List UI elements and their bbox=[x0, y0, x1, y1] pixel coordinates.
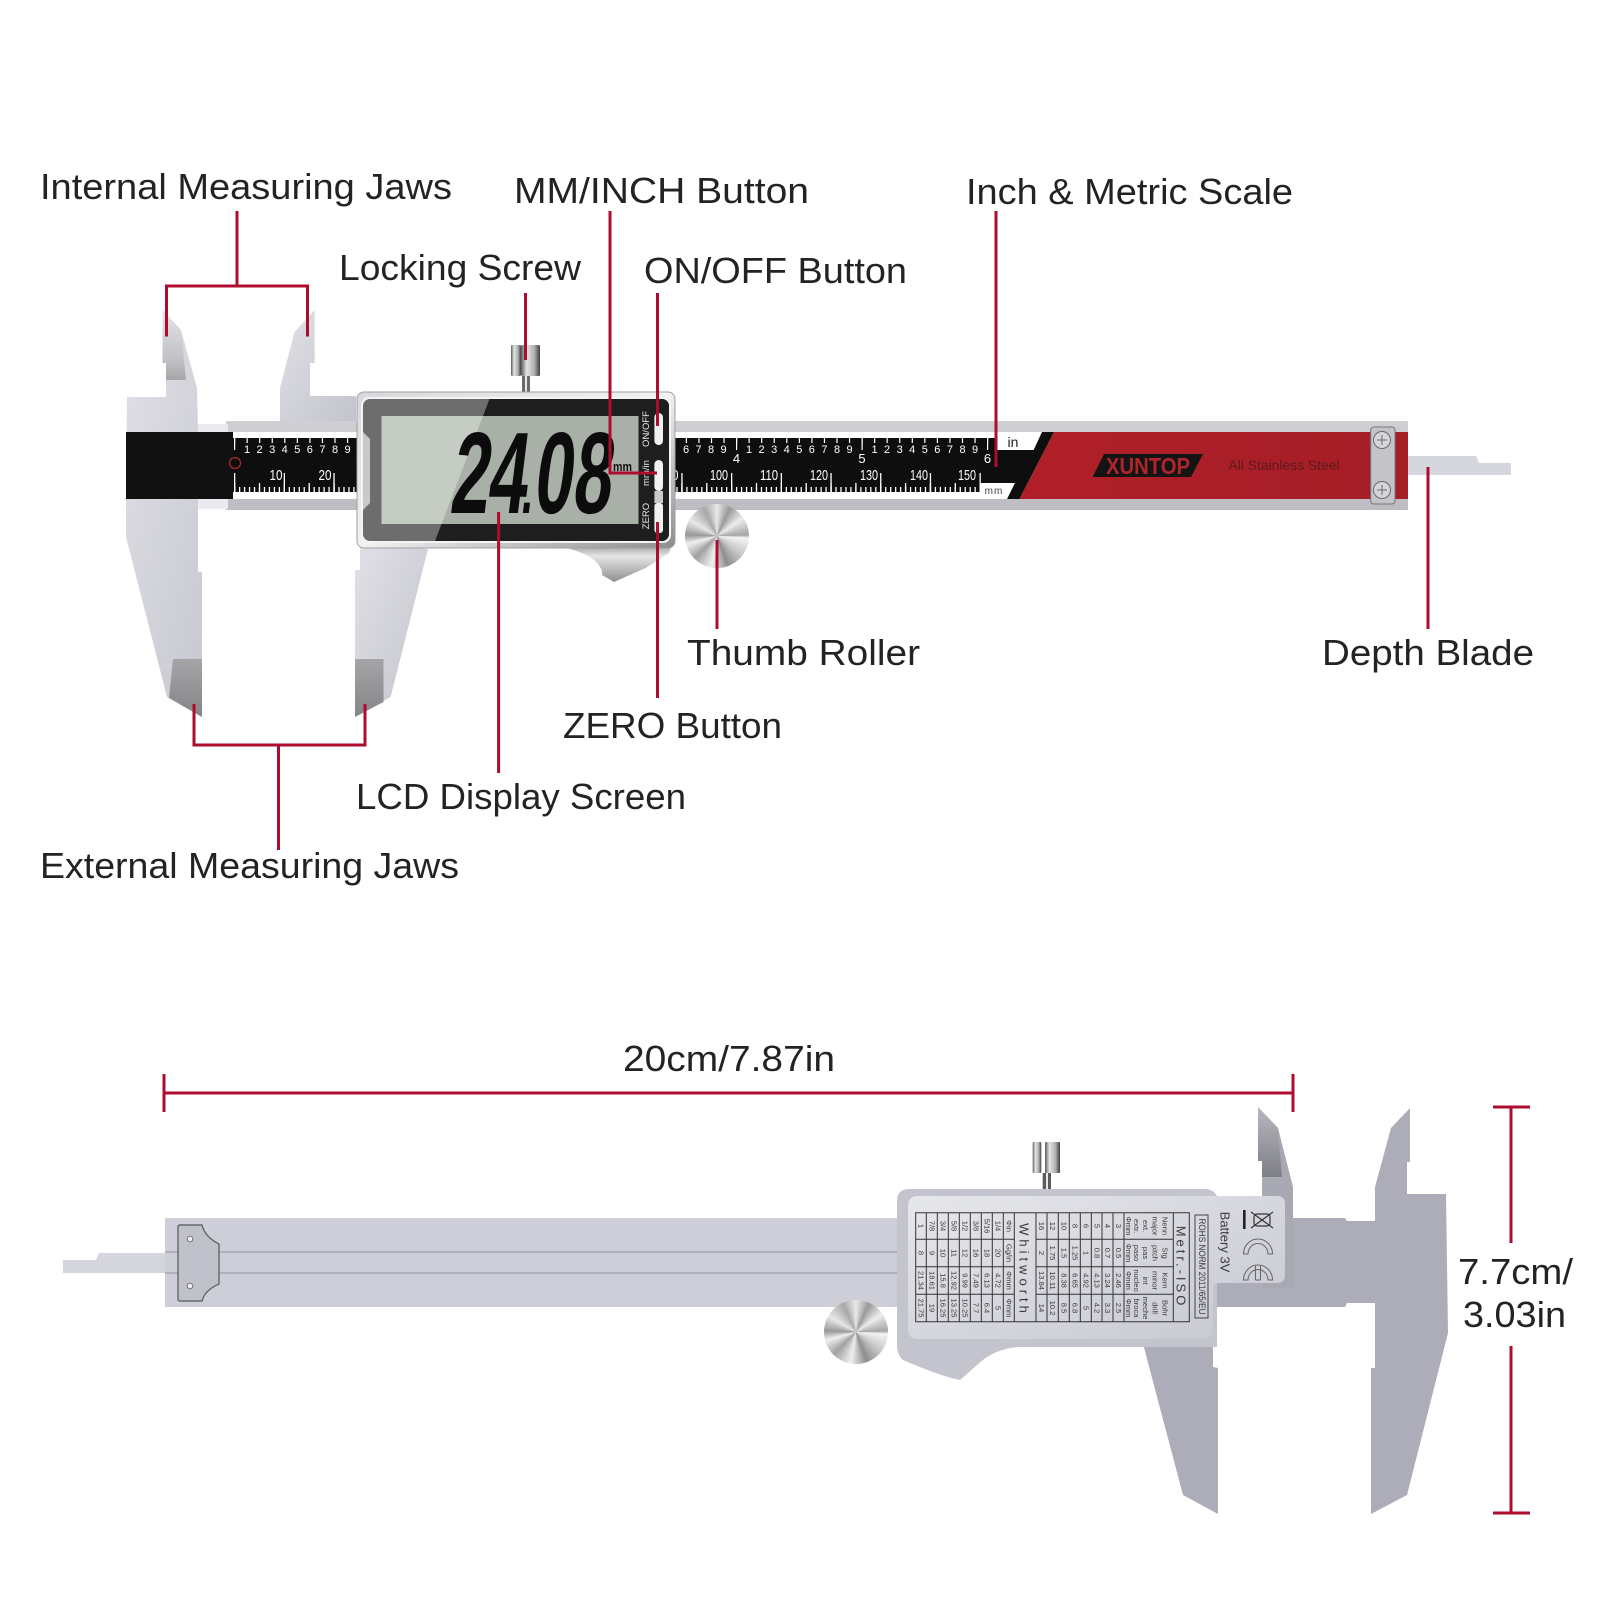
label: Internal Measuring Jaws: Internal Measuring Jaws bbox=[40, 166, 452, 207]
metric rows: 6.65 bbox=[1070, 1273, 1079, 1288]
label: Depth Blade: Depth Blade bbox=[1322, 632, 1534, 673]
metric column headers bbox=[1124, 1216, 1170, 1319]
whitworth rows: 7.7 bbox=[972, 1303, 980, 1313]
bottom beam bbox=[165, 1218, 905, 1307]
metric rows: 3 bbox=[1114, 1224, 1123, 1228]
whitworth rows: Φmm bbox=[1004, 1271, 1014, 1290]
whitworth rows: 6.13 bbox=[982, 1273, 992, 1288]
metric rows: 4 bbox=[1103, 1224, 1112, 1228]
millimetre numbers: 140 bbox=[910, 467, 928, 484]
metric rows: 14 bbox=[1037, 1304, 1046, 1312]
millimetre numbers: 100 bbox=[710, 467, 728, 484]
red logo band: XUNTOP bbox=[1106, 453, 1190, 479]
metric rows: 8.5 bbox=[1059, 1303, 1068, 1313]
metric rows: 0.7 bbox=[1103, 1248, 1112, 1258]
metric column headers: minor bbox=[1150, 1271, 1160, 1290]
red logo band bbox=[1020, 432, 1408, 499]
whitworth rows: 16.25 bbox=[938, 1298, 948, 1318]
thumb hook bbox=[428, 535, 675, 582]
ruler scale: 123456789 bbox=[746, 444, 853, 456]
millimetre numbers bbox=[270, 467, 976, 484]
ruler scale: 123456789 bbox=[871, 444, 978, 456]
metric rows: 1 bbox=[1081, 1251, 1090, 1255]
whitworth rows: 12.92 bbox=[950, 1271, 958, 1290]
metric rows bbox=[1037, 1222, 1123, 1315]
metric rows: 10 bbox=[1059, 1222, 1068, 1230]
depth blade bbox=[1408, 456, 1511, 475]
whitworth rows: 5 bbox=[994, 1306, 1002, 1310]
metric column headers: drill bbox=[1150, 1302, 1160, 1314]
metric rows: 2 bbox=[1037, 1251, 1046, 1255]
inch unit: in bbox=[1008, 434, 1018, 450]
metric column headers: int bbox=[1141, 1276, 1150, 1285]
millimetre numbers: 110 bbox=[760, 467, 778, 484]
metric column headers: Nenn bbox=[1160, 1217, 1170, 1235]
metric column headers: Φmm bbox=[1124, 1271, 1133, 1290]
whitworth rows: 4.72 bbox=[994, 1273, 1002, 1288]
whitworth rows: 5/8 bbox=[950, 1221, 958, 1231]
metric column headers: broca bbox=[1132, 1298, 1141, 1318]
label: MM/INCH Button: MM/INCH Button bbox=[514, 170, 809, 211]
millimetre numbers: 150 bbox=[958, 467, 976, 484]
whitworth rows: 8 bbox=[916, 1251, 926, 1255]
whitworth rows: 10 bbox=[938, 1249, 948, 1257]
metric title: Metr.-ISO bbox=[1174, 1226, 1188, 1308]
metric column headers: Φmm bbox=[1124, 1299, 1133, 1317]
ruler scale: 6 bbox=[984, 451, 991, 466]
whitworth rows: 1/2 bbox=[960, 1221, 970, 1231]
millimetre numbers: 10 bbox=[270, 467, 282, 484]
label: ON/OFF Button: ON/OFF Button bbox=[644, 250, 907, 291]
whitworth rows: 18.61 bbox=[928, 1271, 936, 1290]
locking screw bbox=[1033, 1142, 1060, 1192]
height label bbox=[1458, 1251, 1573, 1335]
LCD housing bbox=[357, 392, 675, 548]
thread table bbox=[916, 1212, 1232, 1322]
label: Inch and Metric Scale: Inch & Metric Scale bbox=[966, 171, 1293, 212]
height label: 7.7cm/ bbox=[1458, 1251, 1573, 1292]
width label: 20cm/7.87in bbox=[623, 1038, 835, 1079]
whitworth rows: 15.8 bbox=[938, 1273, 948, 1288]
buttons: mm/in bbox=[641, 460, 652, 486]
spec label plate bbox=[908, 1196, 1285, 1339]
metric rows: 5 bbox=[1092, 1224, 1101, 1228]
metric column headers: Φmm bbox=[1124, 1217, 1133, 1235]
ROHS box: ROHS NORM 2011/65/EU bbox=[1196, 1218, 1207, 1315]
ruler scale: 4 bbox=[733, 451, 740, 466]
whitworth rows: 18 bbox=[982, 1249, 992, 1257]
metric column headers: extr. bbox=[1132, 1219, 1141, 1233]
metric rows: 5 bbox=[1081, 1306, 1090, 1310]
metric rows: 4.2 bbox=[1092, 1303, 1101, 1313]
sliding jaw lower bbox=[355, 545, 428, 717]
metric rows: 6 bbox=[1081, 1224, 1090, 1228]
red logo band: All Stainless Steel bbox=[1228, 457, 1340, 473]
whitworth rows: 20 bbox=[994, 1249, 1002, 1257]
bottom depth blade bbox=[63, 1253, 170, 1273]
LCD screen bbox=[382, 416, 638, 524]
whitworth rows: 1/4 bbox=[994, 1221, 1002, 1231]
recycling bin icon bbox=[1243, 1210, 1273, 1229]
millimetre numbers: 90 bbox=[666, 467, 678, 484]
bottom thumb roller bbox=[824, 1300, 888, 1364]
metric rows: 10.2 bbox=[1048, 1301, 1057, 1315]
metric rows: 0.8 bbox=[1092, 1248, 1101, 1258]
metric column headers: nucleo bbox=[1132, 1269, 1141, 1292]
callout lines top bbox=[166, 211, 1428, 850]
metric column headers: meche bbox=[1141, 1297, 1150, 1319]
LCD reading: 4 bbox=[483, 409, 537, 538]
whitworth title: Whitworth bbox=[1016, 1223, 1032, 1317]
slider body bbox=[897, 1189, 1217, 1380]
battery note: Battery 3V bbox=[1218, 1212, 1232, 1273]
metric rows: 0.5 bbox=[1114, 1248, 1123, 1258]
whitworth rows: 11 bbox=[950, 1249, 958, 1257]
metric column headers: major bbox=[1150, 1216, 1160, 1236]
whitworth rows: 16 bbox=[972, 1249, 980, 1257]
whitworth rows: 13.25 bbox=[950, 1298, 958, 1318]
label: ZERO Button: ZERO Button bbox=[563, 705, 782, 746]
bottom moving inner jaw bbox=[1258, 1107, 1293, 1288]
metric column headers: pas bbox=[1141, 1247, 1150, 1259]
whitworth rows: 12 bbox=[960, 1249, 970, 1257]
locking screw bbox=[511, 345, 540, 393]
metric column headers: Stg bbox=[1160, 1247, 1170, 1259]
metric rows: 1.25 bbox=[1070, 1246, 1079, 1260]
whitworth rows: 21.34 bbox=[916, 1271, 926, 1290]
whitworth rows: 1 bbox=[916, 1224, 926, 1228]
bottom moving outer jaw bbox=[1142, 1340, 1218, 1514]
metric rows: 3.3 bbox=[1103, 1303, 1112, 1313]
ruler scale bbox=[233, 432, 1054, 499]
bottom caliper bbox=[63, 1107, 1448, 1514]
metric rows: 2.46 bbox=[1114, 1273, 1123, 1288]
metric column headers: Bohr bbox=[1160, 1300, 1170, 1316]
metric column headers: ext. bbox=[1141, 1220, 1150, 1232]
label: External Measuring Jaws: External Measuring Jaws bbox=[40, 845, 459, 886]
metric rows: 1.75 bbox=[1048, 1246, 1057, 1260]
bottom fixed jaw and crossbar bbox=[1210, 1108, 1448, 1514]
inch numbers: 123456789 bbox=[244, 444, 351, 456]
mm unit: mm bbox=[985, 486, 1003, 497]
end plate bbox=[1371, 427, 1395, 504]
whitworth rows: 9 bbox=[928, 1251, 936, 1255]
ruler scale: 6789 bbox=[683, 444, 727, 456]
metric rows: 12 bbox=[1048, 1222, 1057, 1230]
whitworth rows: 7.49 bbox=[972, 1273, 980, 1288]
beam bbox=[198, 421, 1408, 510]
metric rows: 13.84 bbox=[1037, 1271, 1046, 1290]
whitworth rows: Φin bbox=[1004, 1220, 1014, 1232]
metric rows: 8.38 bbox=[1059, 1273, 1068, 1288]
LCD reading: 2 bbox=[446, 409, 500, 538]
sliding jaw upper bbox=[280, 310, 356, 421]
top caliper bbox=[126, 310, 1511, 717]
whitworth rows: 7/8 bbox=[928, 1221, 936, 1231]
whitworth rows: 3/4 bbox=[938, 1221, 948, 1231]
buttons: ZERO bbox=[641, 503, 652, 529]
metric column headers: pitch bbox=[1150, 1245, 1160, 1261]
millimetre numbers: 130 bbox=[860, 467, 878, 484]
metric rows: 10.11 bbox=[1048, 1271, 1057, 1290]
LCD unit: mm bbox=[613, 459, 632, 474]
millimetre numbers: 20 bbox=[318, 467, 332, 484]
metric rows: 16 bbox=[1037, 1222, 1046, 1230]
metric rows: 6.8 bbox=[1070, 1303, 1079, 1313]
LCD reading: . bbox=[518, 450, 539, 529]
buttons: ON/OFF bbox=[641, 411, 652, 447]
LCD reading: 8 bbox=[568, 409, 622, 538]
metric rows: 1.5 bbox=[1059, 1248, 1068, 1258]
millimetre numbers: 120 bbox=[810, 467, 828, 484]
metric rows: 4.13 bbox=[1092, 1273, 1101, 1288]
thumb roller bbox=[685, 504, 749, 568]
whitworth rows: 19 bbox=[928, 1304, 936, 1312]
label: Thumb Roller: Thumb Roller bbox=[687, 632, 920, 673]
metric rows: 4.92 bbox=[1081, 1273, 1090, 1288]
whitworth rows: Gg/in bbox=[1004, 1244, 1014, 1262]
metric column headers: paso bbox=[1132, 1245, 1141, 1261]
fixed jaw bbox=[126, 310, 240, 717]
whitworth rows: 10.25 bbox=[960, 1298, 970, 1318]
label: LCD Display Screen: LCD Display Screen bbox=[356, 776, 686, 817]
width dimension line bbox=[164, 1074, 1293, 1112]
whitworth rows: 6.4 bbox=[982, 1303, 992, 1313]
bottom end plate bbox=[178, 1225, 219, 1301]
metric rows: 3.24 bbox=[1103, 1273, 1112, 1288]
whitworth rows: 21.75 bbox=[916, 1298, 926, 1318]
metric column headers: Φmm bbox=[1124, 1244, 1133, 1262]
whitworth rows: 9.99 bbox=[960, 1273, 970, 1288]
height label: 3.03in bbox=[1463, 1294, 1566, 1335]
buttons bbox=[641, 411, 663, 533]
metric rows: 8 bbox=[1070, 1224, 1079, 1228]
whitworth rows: 3/8 bbox=[972, 1221, 980, 1231]
height dimension line bbox=[1493, 1107, 1530, 1513]
label: Locking Screw: Locking Screw bbox=[339, 247, 582, 288]
whitworth rows bbox=[916, 1219, 1014, 1318]
LCD reading: 0 bbox=[529, 409, 583, 538]
whitworth rows: Φmm bbox=[1004, 1299, 1014, 1317]
ruler scale: 5 bbox=[858, 451, 866, 466]
metric column headers: Kern bbox=[1160, 1272, 1170, 1289]
metric rows: 2.5 bbox=[1114, 1303, 1123, 1313]
whitworth rows: 5/16 bbox=[982, 1219, 992, 1233]
CE mark icon bbox=[1244, 1239, 1272, 1280]
